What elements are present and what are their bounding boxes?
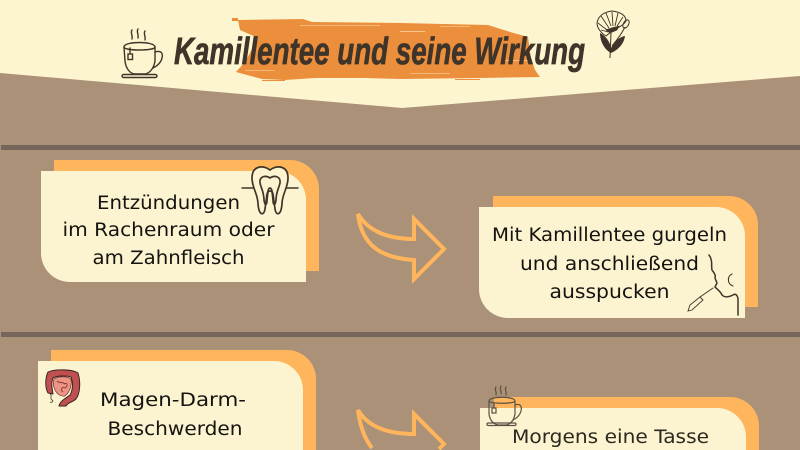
card shadow xyxy=(493,196,758,307)
card text: Beschwerden xyxy=(108,419,242,440)
header banner xyxy=(0,0,800,108)
panel: gargle xyxy=(479,196,758,318)
card body xyxy=(41,171,306,282)
card shadow xyxy=(51,350,316,450)
card text: Mit Kamillentee gurgeln xyxy=(492,225,727,246)
icon: chamomile flower xyxy=(597,11,631,58)
card text xyxy=(492,225,727,303)
card body xyxy=(480,408,746,450)
title: Kamillentee und seine Wirkung xyxy=(174,31,585,73)
card body xyxy=(38,361,303,450)
arrow: second row xyxy=(358,410,444,449)
icon: tooth xyxy=(242,167,298,214)
title brush stroke xyxy=(232,18,540,81)
arrow: first row xyxy=(358,214,444,279)
card shadow xyxy=(494,397,759,450)
icon: tea cup xyxy=(487,386,521,426)
icon: gargling profile xyxy=(688,255,738,315)
panel: stomach complaints xyxy=(38,350,316,450)
card text: im Rachenraum oder xyxy=(62,220,275,241)
card text: Morgens eine Tasse xyxy=(512,427,709,448)
card text xyxy=(100,390,246,440)
card text: ausspucken xyxy=(550,282,670,303)
card text: Entzündungen xyxy=(97,193,240,214)
card body xyxy=(479,207,745,318)
panel: morning tea xyxy=(480,386,759,450)
card text: Magen-Darm- xyxy=(100,390,246,411)
icon: intestine xyxy=(46,370,80,406)
card text xyxy=(62,193,275,269)
card text: am Zahnfleisch xyxy=(92,248,244,269)
panel: inflammation xyxy=(41,160,319,282)
card text: und anschließend xyxy=(520,254,699,275)
icon: tea cup in header xyxy=(122,29,162,78)
card shadow xyxy=(54,160,319,271)
